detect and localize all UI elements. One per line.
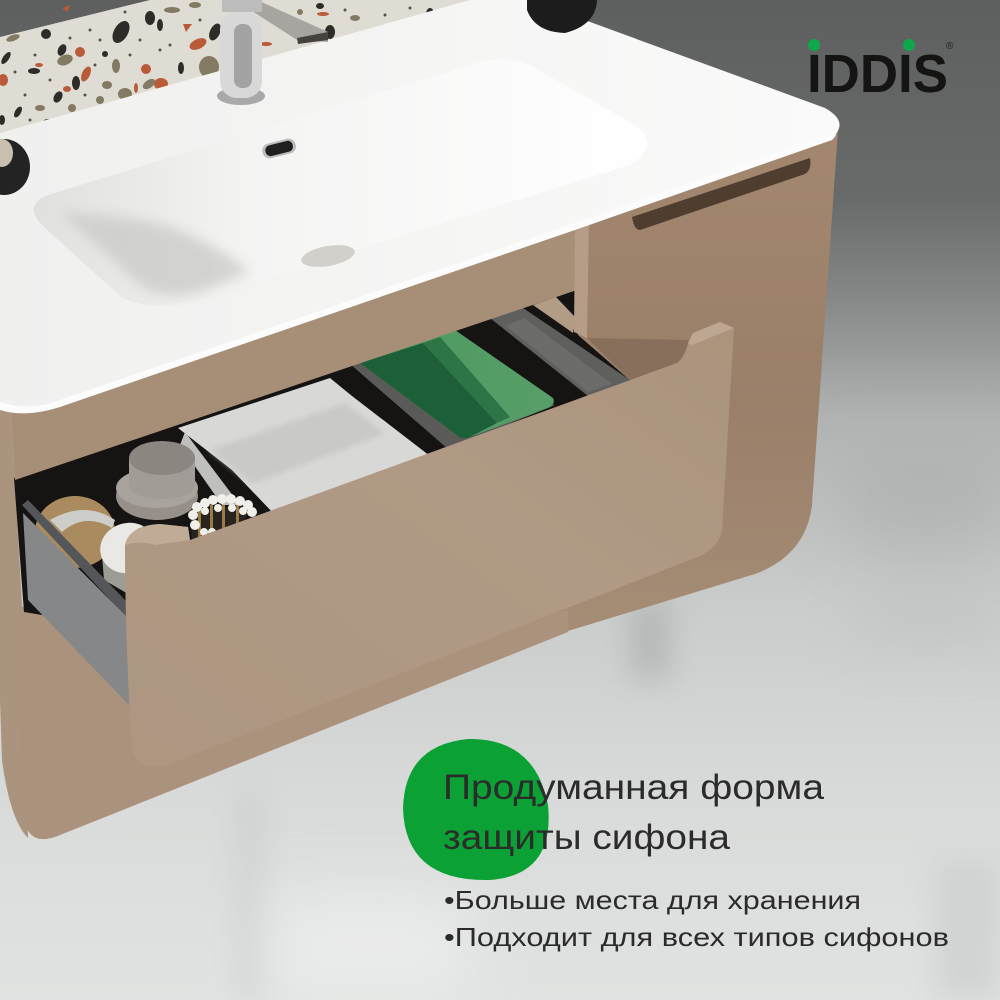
door handle groove — [632, 158, 810, 230]
grey drawer side wall — [22, 500, 130, 706]
folded white towel — [178, 378, 430, 515]
countertop — [0, 0, 840, 413]
bullet list: •Подходит для всех типов сифонов — [444, 922, 949, 952]
logo: IDDIS: IDDIS — [807, 44, 948, 104]
bullet list — [444, 885, 949, 952]
cosmetic jars — [116, 441, 198, 520]
cotton buds — [188, 494, 257, 540]
overflow hole — [261, 137, 297, 160]
upper rail panel — [11, 215, 590, 480]
green blob — [403, 739, 549, 880]
faucet — [217, 0, 328, 105]
terrazzo wall — [0, 0, 490, 150]
left side strip — [0, 408, 28, 838]
left accent dish — [0, 139, 30, 195]
green tray — [360, 330, 554, 438]
round wooden brush — [35, 496, 115, 568]
basin — [34, 59, 647, 305]
drawer interior — [14, 288, 632, 706]
pull-out drawer front — [125, 322, 734, 767]
cabinet right body — [400, 130, 838, 631]
heading — [443, 768, 825, 857]
grey tray rim left — [350, 356, 555, 449]
heading: Продуманная форма — [443, 768, 825, 807]
heading: защиты сифона — [443, 818, 731, 857]
lower drawer front — [16, 606, 568, 839]
black cup — [527, 0, 597, 33]
drain — [300, 241, 356, 271]
shadow behind drawer notch — [587, 338, 690, 382]
bullet list: •Больше места для хранения — [444, 885, 861, 915]
pillar beside door — [574, 220, 589, 338]
white lid jar — [94, 517, 162, 595]
logo: IDDIS: ® — [946, 41, 954, 52]
back ledge — [533, 297, 576, 333]
grey organizer tray right — [490, 306, 630, 396]
